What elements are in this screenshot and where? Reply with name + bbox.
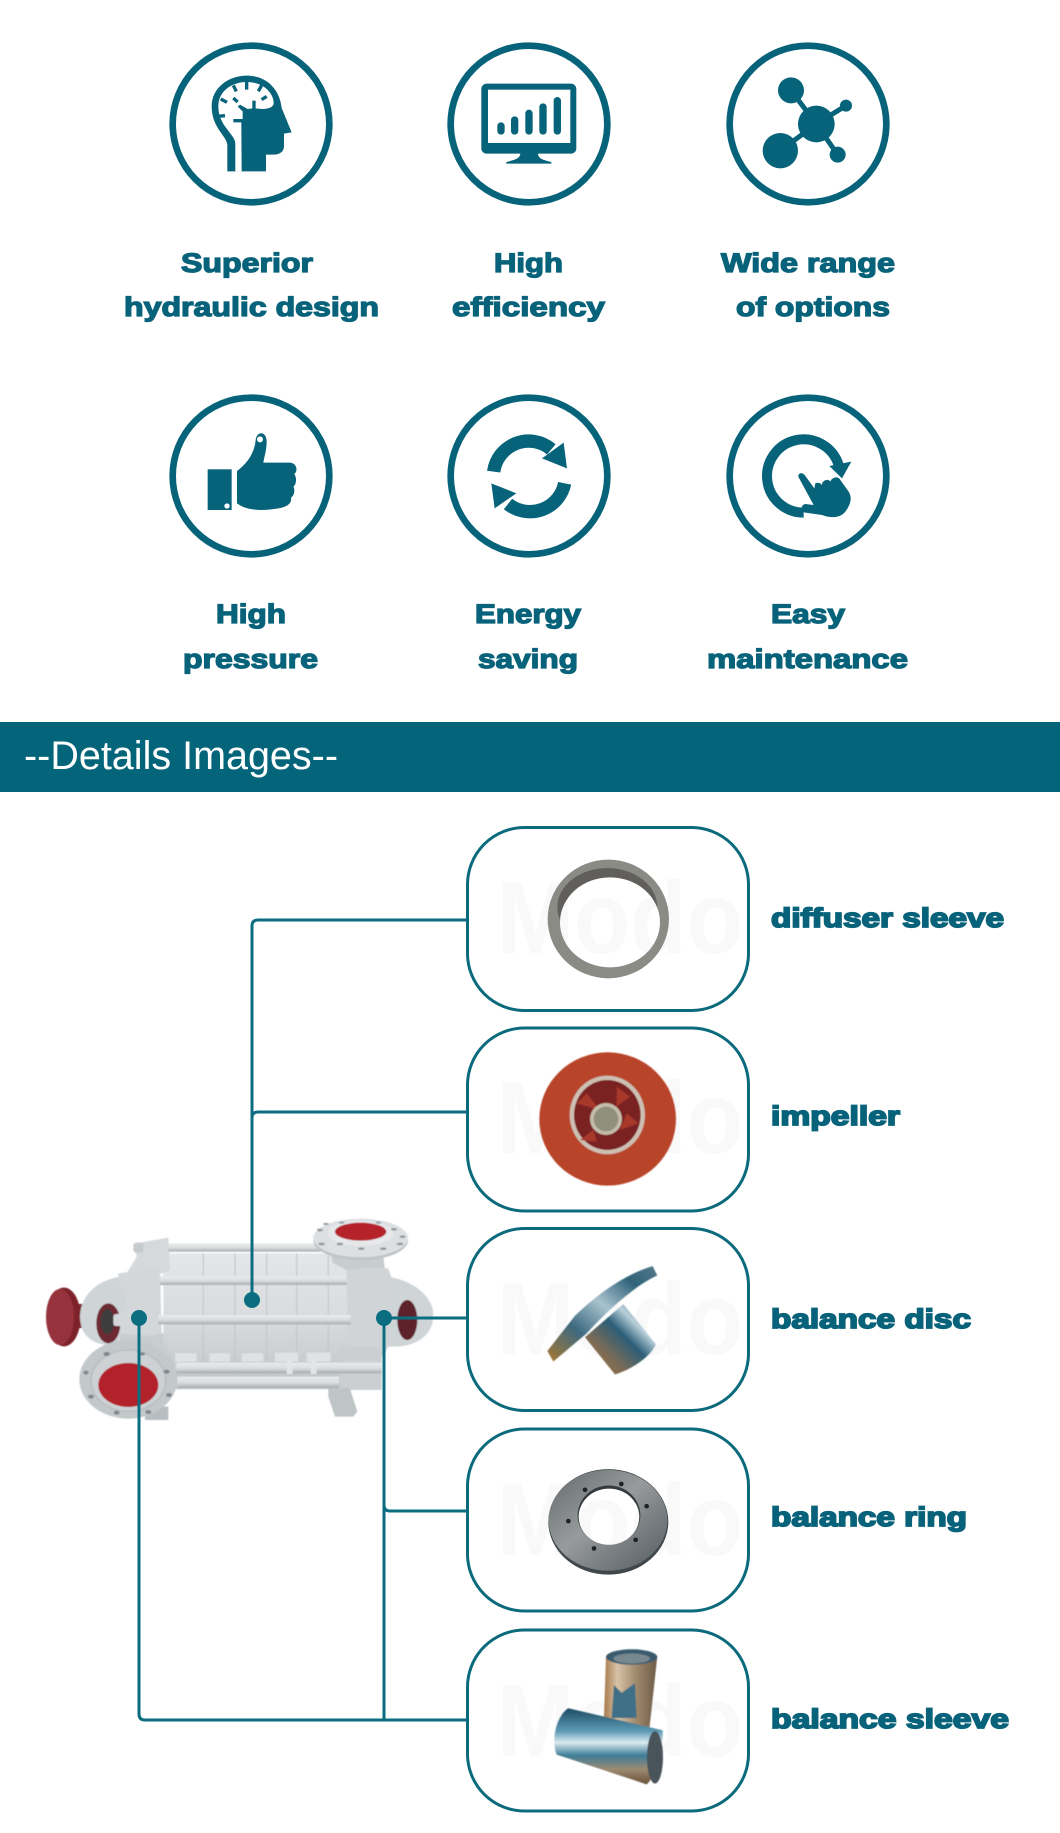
label: wide range of options: Wide range [721,248,895,278]
photo: impeller [539,1052,676,1186]
label: superior hydraulic design: Superior [181,248,314,278]
photo: balance ring [548,1469,668,1575]
feature: wide range of options [721,46,895,322]
label: wide range of options [721,248,895,322]
panel: impeller [468,1028,901,1211]
panel: diffuser sleeve [468,828,1004,1010]
right casing [383,1277,433,1347]
label: easy maintenance [707,599,908,674]
label: superior hydraulic design: hydraulic design [124,292,379,322]
feature: superior hydraulic design [124,46,379,322]
left casing [80,1277,133,1345]
feature: high efficiency [451,46,607,322]
label: energy saving: Energy [475,599,581,629]
panel: balance sleeve [468,1630,1009,1811]
watermark: Modo [497,1664,743,1778]
connector lines [139,920,467,1720]
label: high efficiency [452,248,605,322]
photo: balance disc [547,1266,657,1374]
label: impeller: impeller [771,1101,901,1131]
feature: energy saving [451,398,607,674]
watermark: Modo [497,1262,743,1376]
watermark: Modo [497,1463,743,1577]
discharge flange [313,1219,408,1270]
watermark: Modo [497,861,743,975]
label: energy saving [475,599,581,674]
suction flange [79,1333,177,1420]
pump body [113,1238,393,1417]
label: high efficiency: High [494,248,563,278]
section banner: details images [0,722,1060,792]
connector dots [131,1292,392,1326]
label: superior hydraulic design [124,248,379,322]
icon: thumbs up [173,398,329,554]
label: easy maintenance: maintenance [707,644,908,674]
photo: diffuser sleeve [548,860,669,978]
label: balance ring: balance ring [771,1502,967,1532]
panel: feature icons [124,46,908,674]
handwheel [46,1288,87,1346]
feature: easy maintenance [707,398,908,674]
label: diffuser sleeve: diffuser sleeve [771,903,1004,933]
label: energy saving: saving [478,644,578,674]
label: high efficiency: efficiency [452,292,605,322]
label: balance disc: balance disc [771,1304,971,1334]
label: balance sleeve: balance sleeve [771,1704,1009,1734]
icon: circular arrows [451,398,607,554]
label: wide range of options: of options [736,292,890,322]
icon: monitor chart [451,46,607,202]
feature: high pressure [173,398,329,674]
label: high pressure: pressure [183,644,318,674]
tie rods and pipes [158,1243,382,1388]
label: high pressure [183,599,318,674]
watermark: Modo [497,1061,743,1175]
photo: balance sleeve [554,1649,663,1784]
icon: brain head [173,46,329,202]
label: easy maintenance: Easy [771,599,845,629]
icon: molecule [730,46,886,202]
icon: hand with circular arrow [730,398,886,554]
panel: balance ring [468,1429,967,1611]
panel: balance disc [468,1228,971,1410]
banner heading: --Details Images-- [24,734,338,778]
pump illustration [46,1219,433,1420]
label: high pressure: High [216,599,286,629]
